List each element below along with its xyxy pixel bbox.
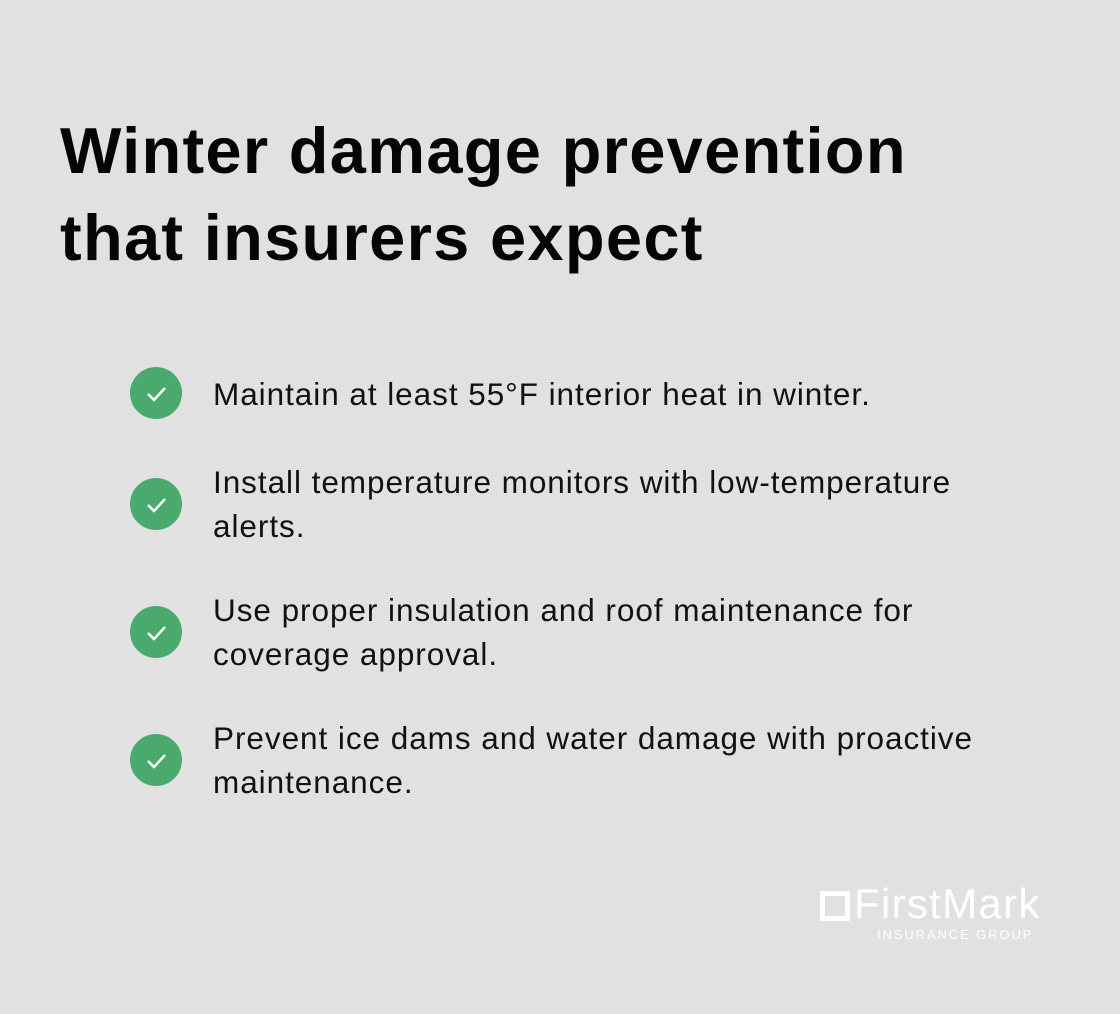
item 1 <box>130 367 871 419</box>
icon: check <box>130 367 182 419</box>
text 4 <box>213 720 973 800</box>
title <box>60 114 907 274</box>
text 2 <box>213 464 951 544</box>
logo <box>820 880 1041 942</box>
item 2 <box>130 464 951 544</box>
text 2: Install temperature monitors with low-temperature <box>213 464 951 500</box>
item 4 <box>130 720 973 800</box>
text 1: Maintain at least 55°F interior heat in winter. <box>213 376 871 412</box>
icon: check <box>130 606 182 658</box>
icon: check <box>130 478 182 530</box>
icon: check <box>130 734 182 786</box>
text 4: Prevent ice dams and water damage with proactive <box>213 720 973 756</box>
text 4: maintenance. <box>213 764 414 800</box>
text 2: alerts. <box>213 508 305 544</box>
text 3 <box>213 592 913 672</box>
text 3: coverage approval. <box>213 636 498 672</box>
text 3: Use proper insulation and roof maintenance for <box>213 592 913 628</box>
title: that insurers expect <box>60 201 704 274</box>
logo subtitle: INSURANCE GROUP <box>877 927 1033 942</box>
title: Winter damage prevention <box>60 114 907 187</box>
logo text: FirstMark <box>854 880 1041 927</box>
item 3 <box>130 592 913 672</box>
logo mark <box>820 891 850 921</box>
